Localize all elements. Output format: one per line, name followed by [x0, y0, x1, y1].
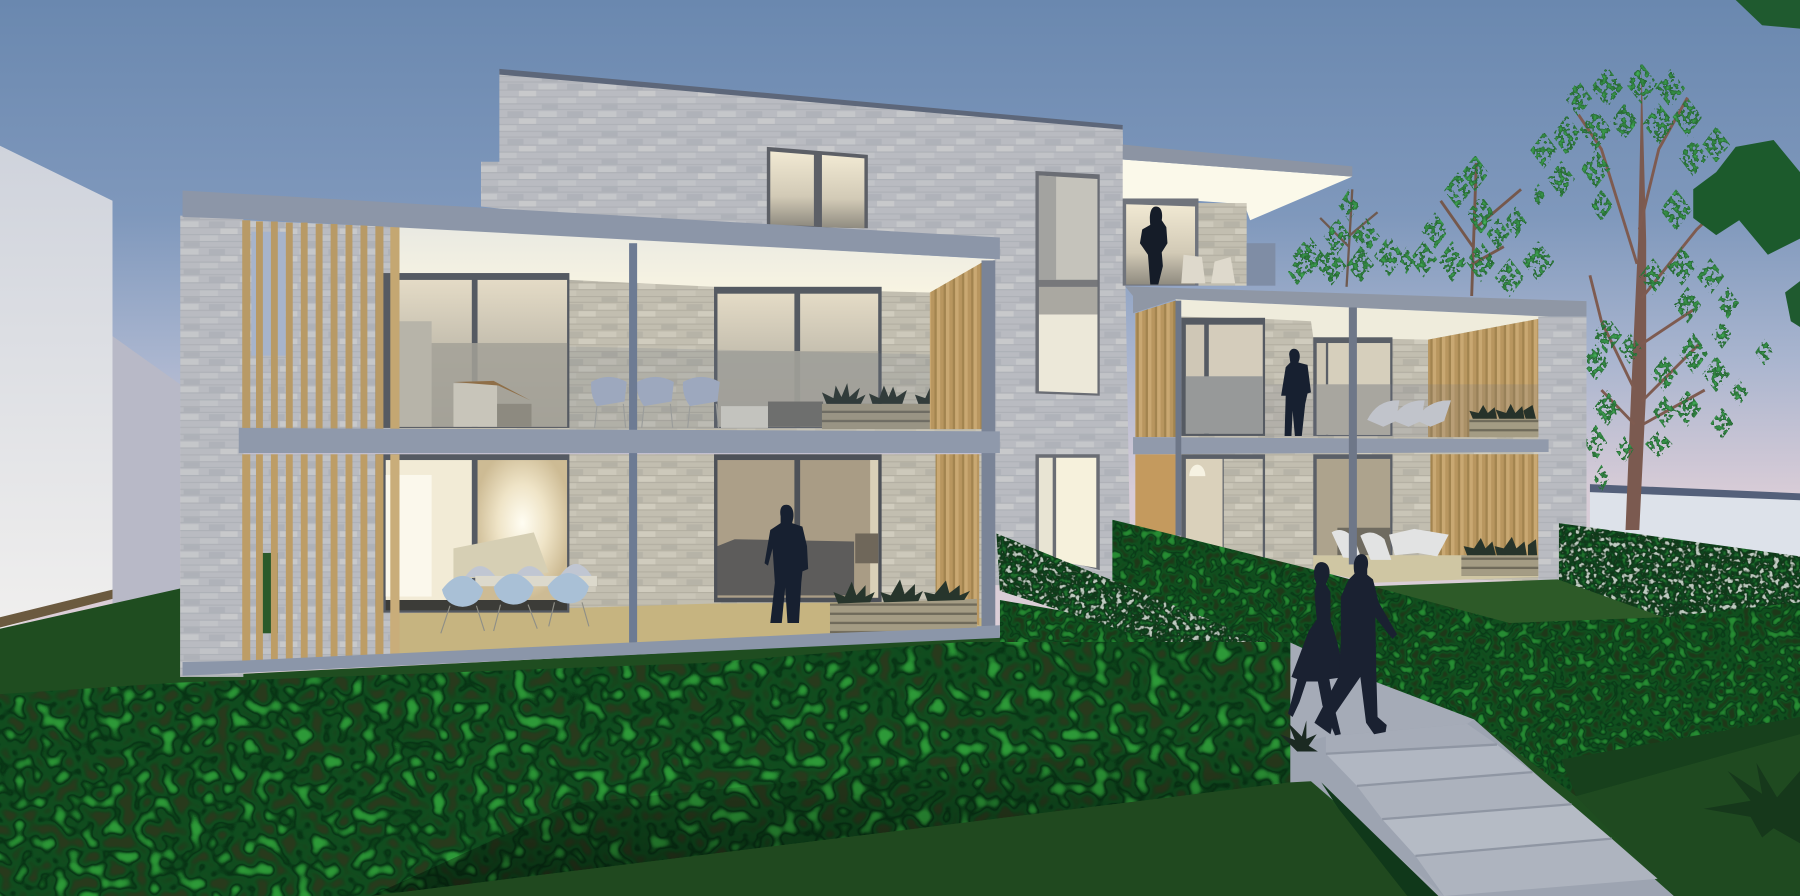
left brick pier	[180, 216, 243, 677]
wood slats left lower	[242, 454, 399, 663]
upper lawn	[1372, 579, 1663, 623]
background trees	[1274, 0, 1800, 530]
upper balcony chairs right	[1367, 400, 1451, 427]
brick wall behind lower slats	[243, 454, 399, 663]
terrace chairs	[1181, 255, 1235, 283]
roof slab	[183, 190, 1000, 259]
penthouse terrace	[1123, 145, 1352, 286]
terrace floor	[1313, 555, 1538, 583]
right wing	[1125, 286, 1586, 584]
lower planter	[1461, 537, 1538, 576]
wood screen right upper	[930, 263, 982, 429]
wood screen right lower	[936, 454, 979, 625]
person: right wing balcony man	[1281, 349, 1311, 436]
roof slab	[1125, 286, 1586, 317]
front lawn	[371, 781, 1423, 896]
columns	[629, 243, 637, 642]
small plant by stair	[1280, 720, 1318, 751]
mid slab	[1133, 437, 1549, 454]
window: ground floor side	[1035, 454, 1100, 570]
left wing	[180, 190, 1000, 677]
window: top floor	[767, 147, 868, 228]
upper lounge window	[714, 287, 882, 428]
gappy far hedges	[996, 523, 1800, 642]
brick wall behind upper slats	[243, 220, 399, 429]
dining set	[441, 564, 597, 633]
lower lounge window	[714, 454, 882, 602]
lower planter	[830, 579, 977, 633]
right pier	[1538, 317, 1586, 584]
lower right wood screen	[1430, 454, 1538, 558]
mid slab	[239, 428, 1000, 453]
hedge shadow	[371, 734, 1290, 896]
upper ceiling	[375, 226, 995, 293]
lawn	[0, 589, 1800, 896]
lower floor wall	[399, 454, 990, 654]
upper balcony chairs	[591, 377, 768, 428]
ceiling	[1176, 299, 1549, 340]
left wood lower	[1135, 454, 1176, 539]
left wood upper	[1135, 301, 1176, 437]
people: couple walking	[1288, 554, 1397, 735]
glass balustrade tint	[569, 346, 990, 429]
columns	[1176, 301, 1181, 536]
person: penthouse woman	[1140, 207, 1167, 285]
glass tint	[1265, 384, 1538, 437]
upper planter	[822, 383, 963, 429]
lower window right	[1313, 454, 1392, 555]
bottom slab	[183, 625, 1000, 676]
glossy stair wedge	[1321, 782, 1438, 896]
distant low building right	[1590, 484, 1800, 608]
upper kitchen window	[375, 273, 569, 428]
upper window right	[1313, 337, 1392, 436]
lower kitchen window	[375, 454, 569, 613]
thin dark strip on hedge right	[1561, 717, 1800, 796]
staircase	[1290, 719, 1674, 896]
wood slats left upper	[242, 220, 399, 429]
hedge seen through lower slats	[257, 553, 278, 633]
staircase landing	[1290, 642, 1674, 896]
sky through upper slats	[251, 232, 286, 356]
window: tall stair	[1035, 171, 1100, 396]
neighbouring white building	[0, 146, 180, 629]
front hedge	[0, 642, 1297, 896]
walls	[1181, 317, 1538, 582]
lower dining set	[1332, 529, 1449, 560]
upper floor wall	[399, 227, 990, 431]
lower window left	[1181, 454, 1265, 563]
back hedges	[987, 505, 1800, 803]
right lawn	[1576, 734, 1800, 896]
person: left lower terrace man	[765, 505, 808, 623]
terrace floor	[390, 602, 990, 656]
agave plant bottom right	[1704, 763, 1800, 843]
upper window left	[1181, 318, 1265, 436]
upper right wood screen	[1428, 319, 1538, 437]
upper planter	[1469, 404, 1538, 437]
main upper block	[481, 69, 1131, 585]
